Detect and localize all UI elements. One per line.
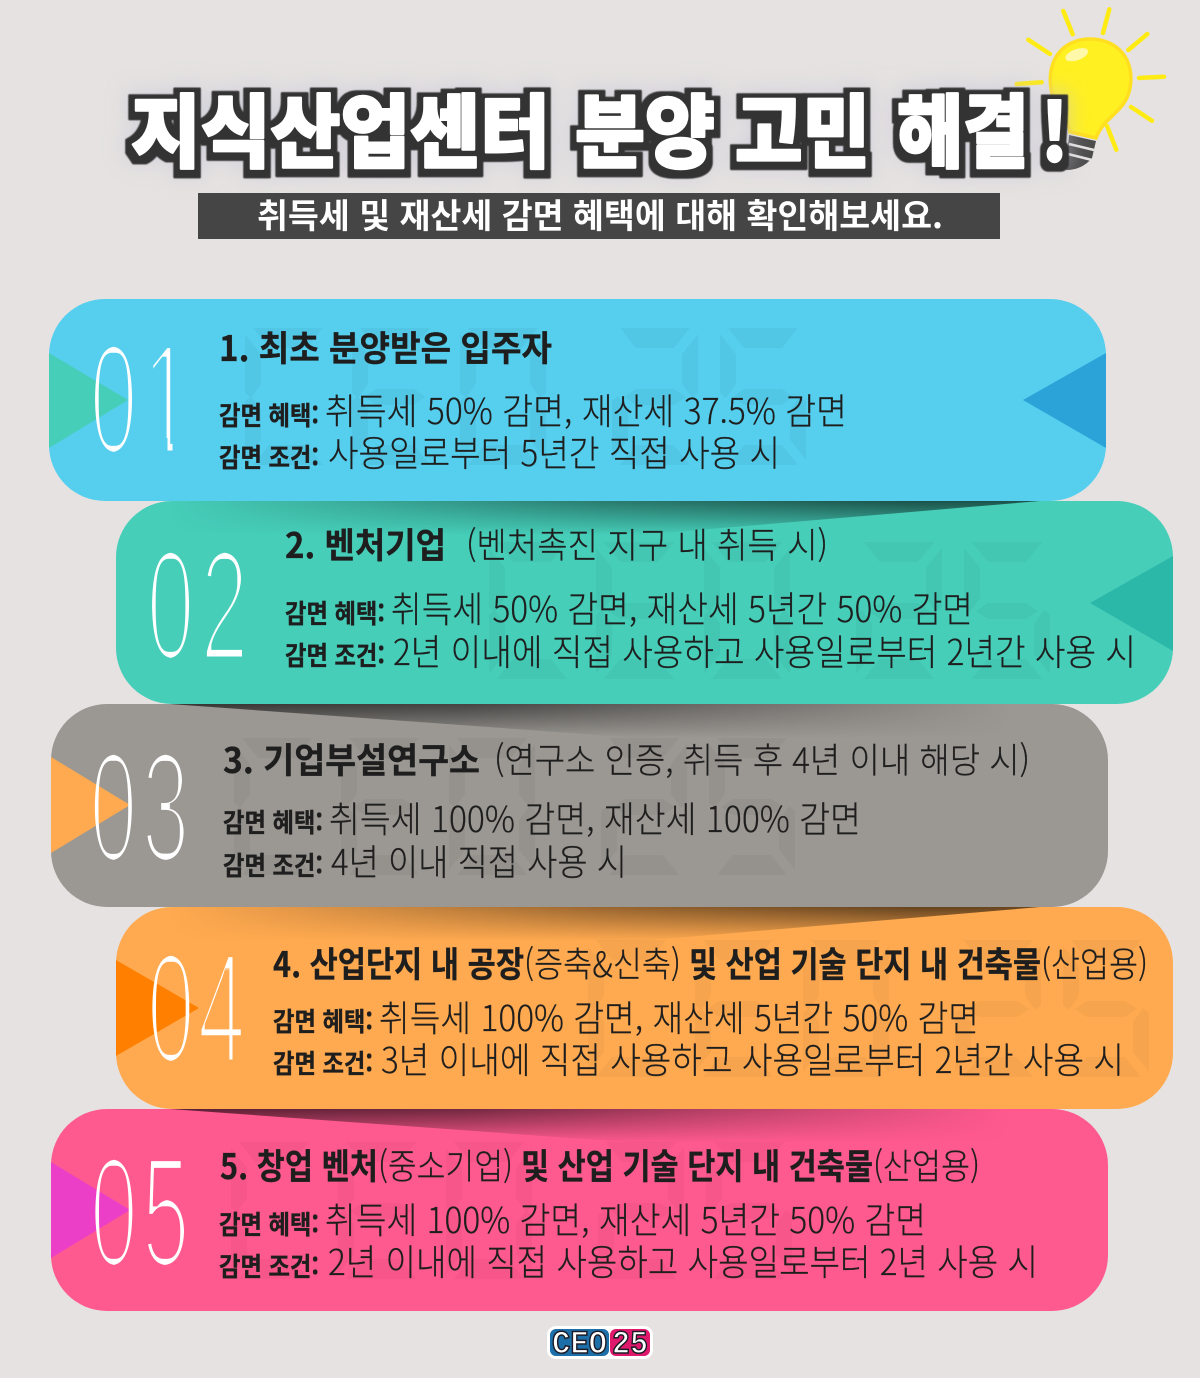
number 01 [95, 346, 172, 452]
heading 4 part b: 및 산업 기술 단지 내 건축물 [689, 937, 1041, 988]
benefit text 5: 취득세 100% 감면, 재산세 5년간 50% 감면 [325, 1192, 926, 1244]
condition label 4: 감면 조건: [273, 1044, 373, 1081]
condition text 5: 2년 이내에 직접 사용하고 사용일로부터 2년 사용 시 [328, 1234, 1038, 1286]
title: 지식산업센터 [131, 69, 550, 185]
benefit label 4: 감면 혜택: [273, 1002, 373, 1039]
condition text 3: 4년 이내 직접 사용 시 [331, 834, 627, 886]
condition label 1: 감면 조건: [219, 438, 319, 475]
heading note 5 a: (중소기업) [378, 1139, 513, 1190]
title: 고민 [735, 69, 870, 185]
benefit text 3: 취득세 100% 감면, 재산세 100% 감면 [329, 791, 861, 843]
logo: CEO25 [547, 1326, 653, 1363]
title: 분양 [575, 69, 715, 185]
number 04: 4 [198, 921, 245, 1095]
number 05: 0 [90, 1125, 138, 1299]
condition text 2: 2년 이내에 직접 사용하고 사용일로부터 2년간 사용 시 [393, 624, 1136, 676]
condition text 4: 3년 이내에 직접 사용하고 사용일로부터 2년간 사용 시 [381, 1032, 1124, 1084]
benefit label 1: 감면 혜택: [219, 396, 319, 433]
heading 3: 3. 기업부설연구소 [223, 733, 480, 784]
panel: 05 startup venture [51, 1109, 1108, 1311]
panel: 03 corporate research lab [51, 704, 1108, 907]
number 01: 1 [143, 312, 191, 486]
number 03: 3 [142, 720, 189, 894]
title [131, 69, 1068, 185]
title: 해결 [897, 69, 1029, 185]
benefit text 2: 취득세 50% 감면, 재산세 5년간 50% 감면 [391, 581, 973, 633]
condition label 2: 감면 조건: [285, 636, 385, 673]
heading note 4 b: (산업용) [1041, 937, 1148, 988]
number 02: 0 [147, 518, 194, 692]
panel: 02 venture company [116, 501, 1173, 704]
subtitle bar: 취득세 및 재산세 감면 혜택에 대해 확인해보세요. [257, 189, 943, 238]
heading note 3: (연구소 인증, 취득 후 4년 이내 해당 시) [494, 733, 1030, 784]
heading note 2: (벤처촉진 지구 내 취득 시) [466, 518, 828, 569]
heading note 5 b: (산업용) [873, 1139, 980, 1190]
number 03: 0 [90, 720, 137, 894]
panel: 04 industrial complex factory [116, 907, 1173, 1109]
benefit text 1: 취득세 50% 감면, 재산세 37.5% 감면 [325, 383, 847, 435]
heading 2: 2. 벤처기업 [285, 518, 446, 569]
number 02: 2 [201, 518, 248, 692]
heading 5 part b: 및 산업 기술 단지 내 건축물 [521, 1139, 873, 1190]
heading note 4 a: (증축&신축) [524, 937, 681, 988]
benefit text 4: 취득세 100% 감면, 재산세 5년간 50% 감면 [379, 990, 979, 1042]
benefit label 2: 감면 혜택: [285, 594, 385, 631]
panel: 01 first-time buyer [49, 299, 1106, 501]
condition text 1: 사용일로부터 5년간 직접 사용 시 [328, 425, 780, 477]
icon: light bulb [1017, 9, 1164, 170]
number 05: 5 [142, 1125, 190, 1299]
logo: CEO25: 25 [612, 1326, 648, 1363]
title: ! [1041, 69, 1068, 185]
condition label 5: 감면 조건: [219, 1247, 319, 1284]
logo: CEO25: CEO [552, 1326, 607, 1363]
benefit label 5: 감면 혜택: [219, 1205, 319, 1242]
number 04: 0 [147, 921, 195, 1095]
number 01: 0 [90, 312, 137, 486]
heading 5 part a: 5. 창업 벤처 [220, 1139, 378, 1190]
benefit label 3: 감면 혜택: [223, 803, 323, 840]
heading 4 part a: 4. 산업단지 내 공장 [273, 937, 524, 988]
heading 1: 1. 최초 분양받은 입주자 [219, 321, 552, 372]
condition label 3: 감면 조건: [223, 846, 323, 883]
